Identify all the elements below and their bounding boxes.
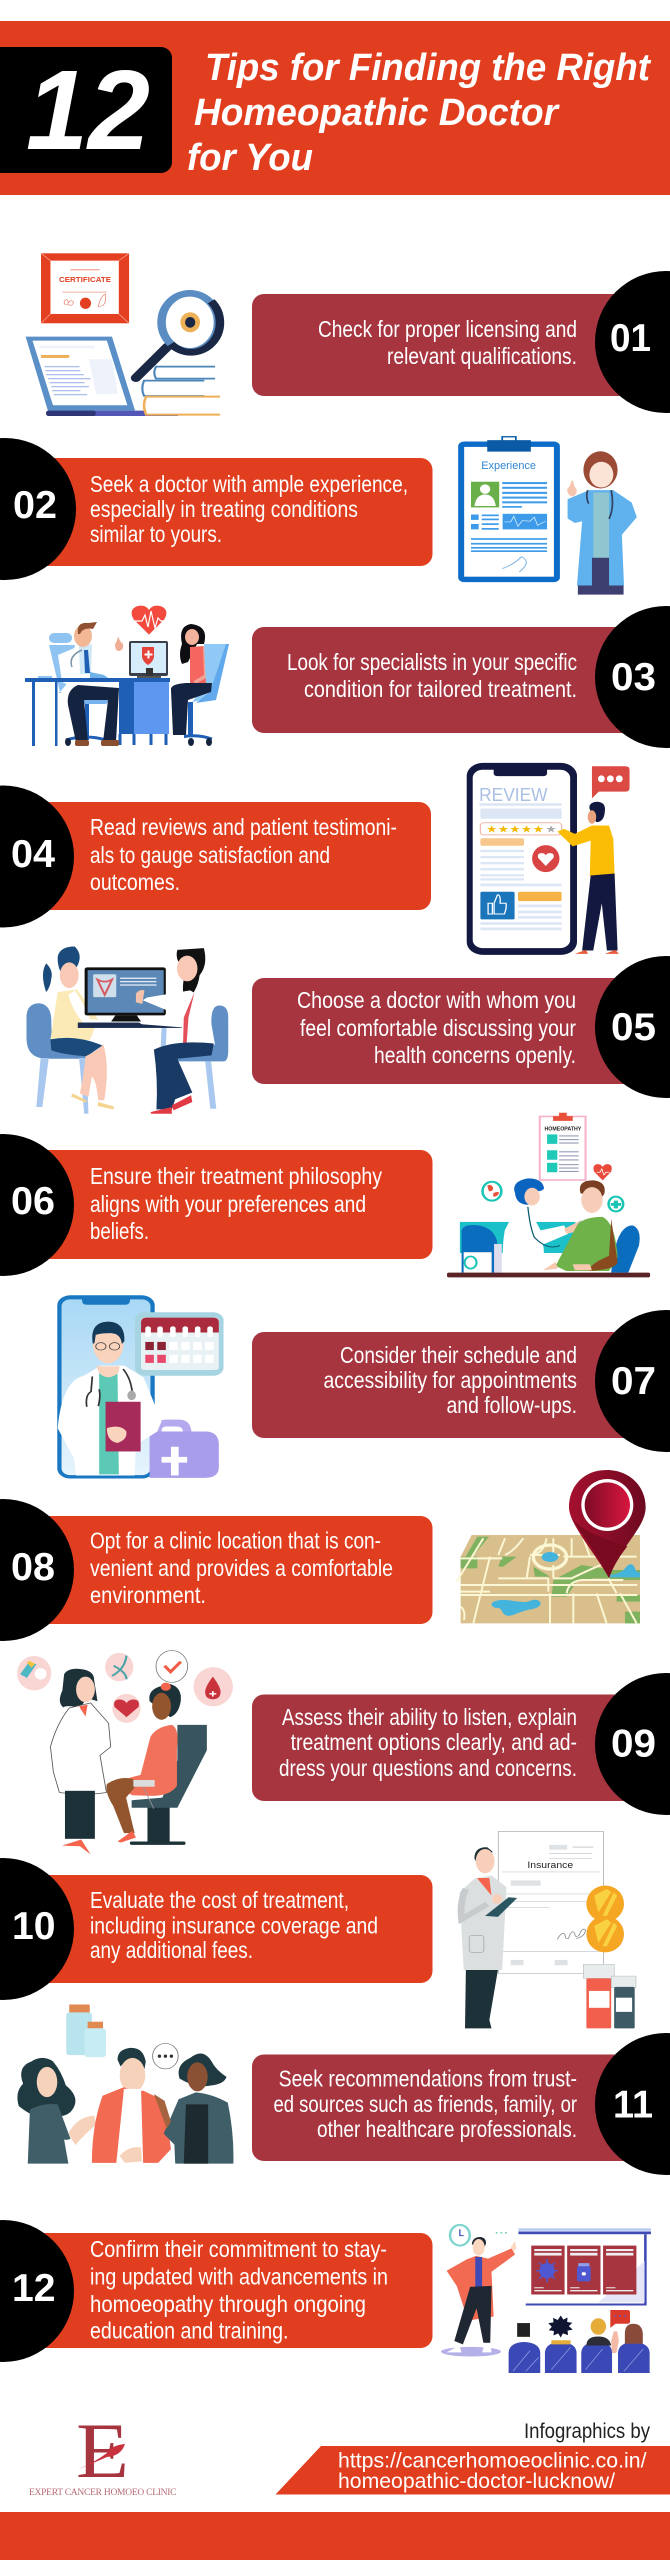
tip 09 (17, 1651, 670, 1854)
tip text: similar to yours. (90, 521, 222, 547)
text panel (0, 802, 431, 910)
tip 02 (0, 437, 637, 595)
tip text: venient and provides a comfortable (90, 1555, 393, 1581)
tip text: Ensure their treatment philosophy (90, 1163, 382, 1189)
number circle (595, 271, 670, 413)
tip 01 (26, 253, 670, 416)
number circle: 12 (12, 2267, 56, 2310)
number circle: 01 (610, 317, 651, 360)
tip text: Seek recommendations from trust- (279, 2066, 577, 2092)
url ribbon: homeopathic-doctor-lucknow/ (338, 2470, 615, 2493)
tip text: health concerns openly. (374, 1042, 576, 1068)
number circle (0, 1499, 74, 1641)
title: Homeopathic Doctor (194, 92, 560, 134)
illustration: review phone and person: ★★★★★ (486, 825, 544, 835)
illustration: experience clipboard and doctor: Experience (481, 460, 536, 472)
tip 12 (0, 2220, 651, 2373)
tip text: environment. (90, 1582, 206, 1608)
tip text: Check for proper licensing and (318, 316, 577, 342)
illustration: doctor talking with seated patient (17, 1651, 233, 1854)
tip text: and follow-ups. (446, 1392, 577, 1418)
tip text: Read reviews and patient testimoni- (90, 814, 397, 840)
number circle: 10 (12, 1905, 56, 1948)
tip 08 (0, 1470, 646, 1641)
tip text: Look for specialists in your specific (287, 649, 577, 675)
text panel (0, 1875, 432, 1983)
text panel (252, 294, 652, 396)
number circle (595, 2033, 670, 2175)
tip text: Assess their ability to listen, explain (282, 1704, 577, 1730)
illustration: homeopathy clipboard, doctor examining patient (447, 1113, 650, 1277)
tip text: Seek a doctor with ample experience, (90, 471, 408, 497)
number badge: 12 (26, 47, 150, 173)
tip text: relevant qualifications. (387, 343, 577, 369)
number circle (0, 786, 74, 928)
tip text: treatment options clearly, and ad- (291, 1729, 577, 1755)
tip text (90, 1528, 393, 1608)
tip text (318, 316, 577, 369)
illustration: doctor with insurance document, coins and bottles: Insurance (527, 1861, 574, 1871)
tip text: Evaluate the cost of treatment, (90, 1887, 349, 1913)
tip text: other healthcare professionals. (317, 2116, 577, 2142)
text panel (252, 627, 652, 733)
tip text: Confirm their commitment to stay- (90, 2236, 387, 2262)
tip 06 (0, 1113, 650, 1277)
number circle: 06 (11, 1180, 55, 1223)
illustration: review phone and person (467, 763, 630, 955)
number circle (0, 438, 76, 580)
number circle: 11 (613, 2084, 653, 2126)
tip text: especially in treating conditions (90, 496, 358, 522)
tip text: accessibility for appointments (324, 1367, 577, 1393)
number circle (0, 2220, 74, 2362)
text panel (0, 458, 432, 566)
illustration: patient and doctor at computer (26, 946, 228, 1114)
text panel (252, 1694, 652, 1801)
illustration: certificate, laptop, magnifier and books: CERTIFICATE (59, 276, 112, 284)
tip text: dress your questions and concerns. (279, 1755, 577, 1781)
number circle: 03 (611, 656, 656, 699)
tip text: Choose a doctor with whom you (297, 987, 576, 1013)
text panel (0, 1150, 432, 1259)
number circle (595, 1310, 670, 1452)
title: Tips for Finding the Right (205, 47, 651, 89)
tip text (90, 2236, 388, 2344)
tip text (90, 814, 397, 895)
illustration: map with location pin (457, 1470, 646, 1623)
number circle: 07 (611, 1360, 656, 1403)
tip 03 (25, 606, 670, 748)
logo: Expert Cancer Homoeo Clinic: E (76, 2407, 129, 2494)
number circle: 09 (611, 1722, 656, 1766)
tip text (90, 1887, 378, 1963)
tip text: condition for tailored treatment. (304, 676, 577, 702)
number circle: 05 (611, 1006, 656, 1049)
tip text: any additional fees. (90, 1937, 253, 1963)
url ribbon: https://cancerhomoeoclinic.co.in/ (338, 2450, 647, 2473)
tip text (287, 649, 577, 702)
number circle (0, 1858, 74, 2000)
illustration: certificate, laptop, magnifier and books (26, 253, 220, 416)
text panel (252, 2054, 652, 2161)
illustration: three people talking with jars (17, 2005, 233, 2164)
illustration: presenter with board and audience (441, 2225, 651, 2373)
logo: Expert Cancer Homoeo Clinic: EXPERT CANCER HOMOEO CLINIC (29, 2488, 176, 2498)
number circle (595, 956, 670, 1098)
title (187, 47, 651, 179)
tip 11 (17, 2005, 670, 2175)
tip 05 (26, 946, 670, 1114)
illustration: review phone and person: REVIEW (479, 783, 548, 805)
tip text: aligns with your preferences and (90, 1191, 366, 1217)
tip 10 (0, 1831, 636, 2028)
credit line: Infographics by (524, 2420, 650, 2443)
header band (0, 21, 670, 195)
tip text: including insurance coverage and (90, 1912, 378, 1938)
text panel (252, 1332, 652, 1438)
tip text: als to gauge satisfaction and (90, 842, 330, 868)
tip text (279, 1704, 577, 1781)
illustration: homeopathy clipboard, doctor examining patient: HOMEOPATHY (545, 1126, 581, 1132)
tip text (274, 2066, 577, 2142)
number circle (595, 1673, 670, 1815)
number circle: 08 (11, 1546, 55, 1589)
logo: Expert Cancer Homoeo Clinic (29, 2407, 176, 2498)
number circle (0, 1134, 74, 1276)
tip text: Consider their schedule and (340, 1342, 577, 1368)
tip text: feel comfortable discussing your (300, 1015, 576, 1041)
url ribbon (276, 2446, 670, 2494)
tip text: education and training. (90, 2318, 288, 2344)
illustration: review phone and person: ★ (545, 825, 557, 835)
tip 07 (57, 1295, 670, 1478)
illustration: doctor and patient at desk (25, 606, 229, 746)
tip text (90, 1163, 382, 1244)
tip text: ing updated with advancements in (90, 2264, 388, 2290)
number circle: 02 (13, 484, 57, 527)
footer band (0, 2512, 670, 2560)
illustration: doctor on phone with calendar and medical kit (57, 1295, 224, 1478)
tip text: ed sources such as friends, family, or (274, 2091, 577, 2117)
text panel (0, 1516, 432, 1624)
tip text (90, 471, 408, 547)
tip 04 (0, 763, 630, 955)
tip text (297, 987, 576, 1068)
illustration: doctor with insurance document, coins and bottles (459, 1831, 636, 2028)
tip text: Opt for a clinic location that is con- (90, 1528, 381, 1554)
text panel (252, 978, 652, 1084)
tip text: beliefs. (90, 1218, 149, 1244)
number circle (595, 606, 670, 748)
number circle: 04 (11, 833, 55, 876)
text panel (0, 2233, 432, 2348)
tip text: outcomes. (90, 869, 180, 895)
tip text (324, 1342, 577, 1418)
title: for You (187, 137, 313, 179)
tip text: homoeopathy through ongoing (90, 2291, 366, 2317)
illustration: experience clipboard and doctor (458, 437, 637, 595)
